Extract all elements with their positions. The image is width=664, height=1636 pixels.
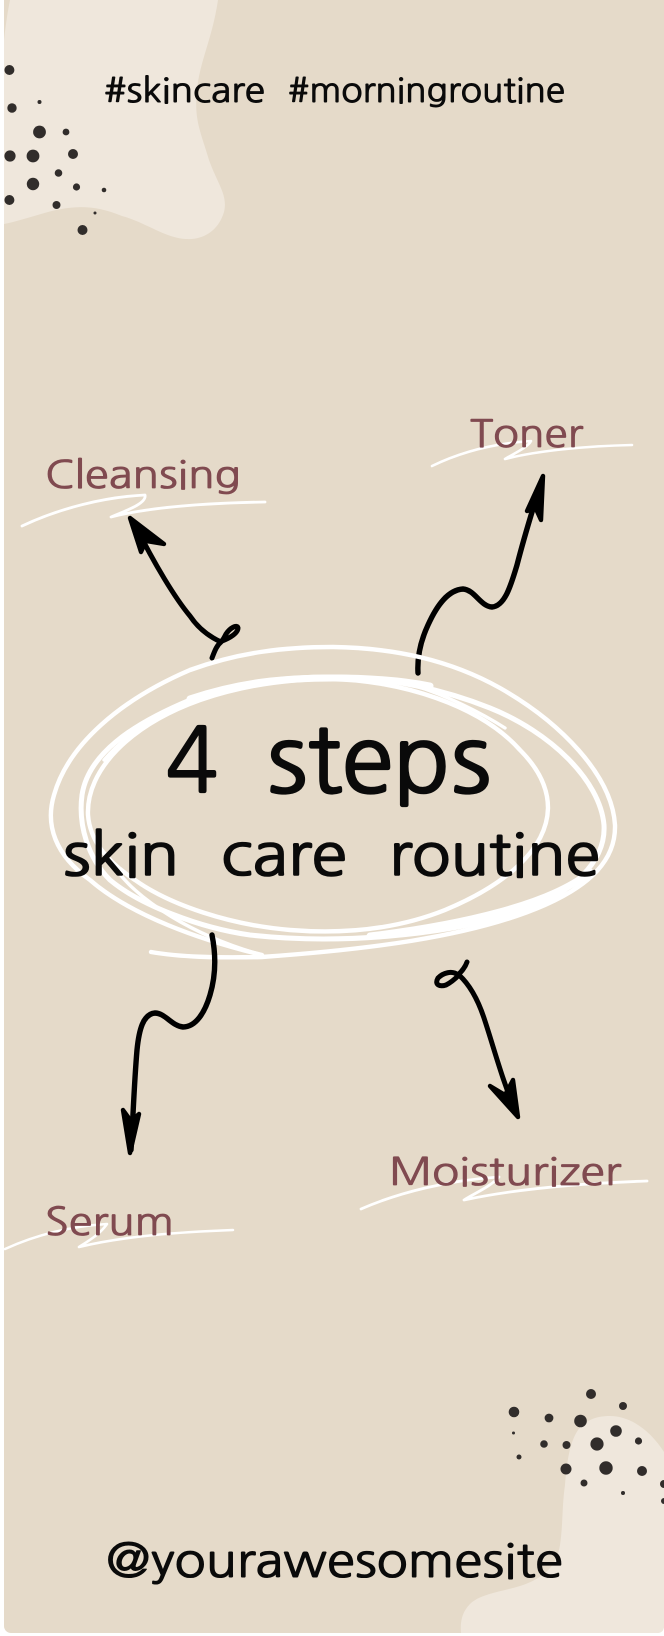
title: 4 steps: 4 bbox=[166, 717, 218, 805]
dots: top left cluster bbox=[4, 65, 106, 235]
label: Serum bbox=[5, 1203, 233, 1249]
subtitle: skin care routine: skin bbox=[63, 826, 179, 884]
hashtags heading: #skincare bbox=[104, 74, 265, 107]
arrow: to Serum bbox=[123, 935, 215, 1153]
lower sweep bbox=[104, 686, 505, 955]
subtitle: skin care routine: care bbox=[221, 826, 347, 884]
thick top band bbox=[190, 678, 430, 699]
thick middle loop bbox=[81, 677, 604, 939]
label: Serum: Serum bbox=[45, 1203, 174, 1241]
label: Cleansing bbox=[22, 456, 265, 526]
arrow: to Moisturizer bbox=[437, 962, 518, 1117]
inner loop bbox=[88, 679, 548, 931]
label: Toner bbox=[432, 415, 632, 466]
label: Moisturizer: Moisturizer bbox=[389, 1153, 621, 1191]
decorative blob: bottom right bbox=[461, 1416, 664, 1633]
scribble circle bbox=[51, 647, 615, 957]
thick bottom band bbox=[370, 872, 590, 936]
title: 4 steps: steps bbox=[267, 714, 491, 806]
outer thin loop bbox=[51, 647, 615, 957]
subtitle: skin care routine bbox=[63, 826, 600, 884]
footer handle: @yourawesomesite bbox=[106, 1538, 563, 1584]
subtitle: skin care routine: routine bbox=[389, 826, 600, 884]
hashtags heading bbox=[104, 74, 565, 107]
label: Toner: Toner bbox=[470, 415, 583, 453]
arrow: to Toner bbox=[418, 476, 543, 673]
hashtags heading: #morningroutine bbox=[288, 74, 565, 107]
label: Moisturizer bbox=[361, 1153, 647, 1209]
arrow: to Cleansing bbox=[130, 518, 238, 658]
dots: bottom right cluster bbox=[509, 1389, 664, 1504]
decorative blob: top left bbox=[4, 0, 225, 239]
label: Cleansing: Cleansing bbox=[45, 456, 241, 494]
title: 4 steps bbox=[166, 714, 491, 806]
